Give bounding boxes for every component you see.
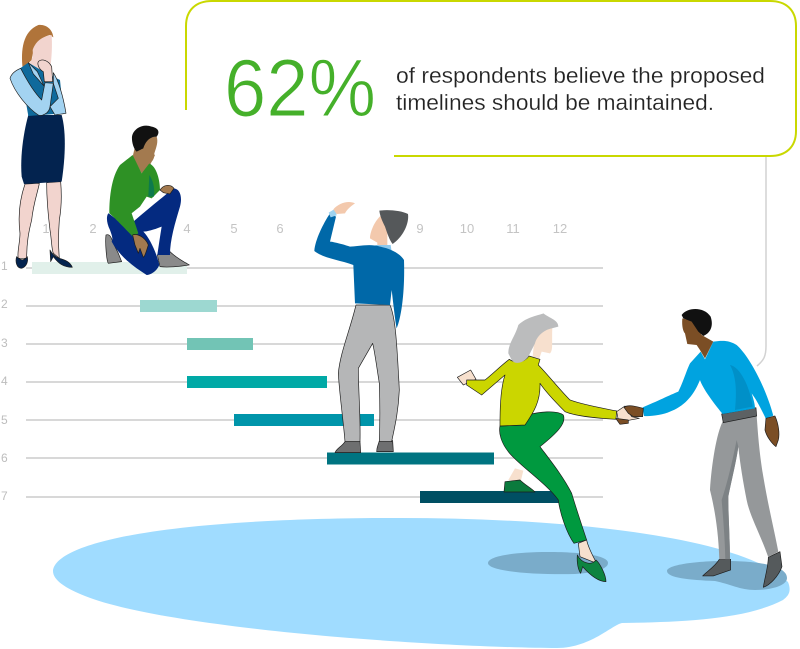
figure: kneeling man in green shirt bbox=[106, 126, 189, 275]
grey connector line bbox=[757, 157, 766, 366]
callout text: of respondents believe the proposed bbox=[396, 63, 765, 88]
column numbers: 5 bbox=[230, 221, 238, 236]
figure: man in blue sweater shading his eyes bbox=[314, 202, 408, 453]
row numbers: 4 bbox=[1, 374, 8, 388]
column numbers: 12 bbox=[553, 221, 567, 236]
callout text bbox=[396, 63, 765, 115]
gantt chart bbox=[1, 221, 603, 503]
column numbers bbox=[42, 221, 567, 236]
row grid lines bbox=[26, 268, 603, 497]
callout text: timelines should be maintained. bbox=[396, 90, 714, 115]
row numbers: 5 bbox=[1, 413, 8, 427]
gantt bars bbox=[32, 262, 560, 503]
row numbers: 2 bbox=[1, 297, 8, 311]
figure: grey-haired woman in yellow sweater stepping up bbox=[457, 313, 639, 582]
callout bubble outline bbox=[186, 1, 796, 156]
column numbers: 4 bbox=[183, 221, 191, 236]
column numbers: 9 bbox=[416, 221, 424, 236]
row numbers: 3 bbox=[1, 336, 8, 350]
column numbers: 10 bbox=[460, 221, 474, 236]
row numbers: 1 bbox=[1, 259, 8, 273]
floor: light blue blob bbox=[53, 518, 790, 648]
row numbers: 6 bbox=[1, 451, 8, 465]
column numbers: 11 bbox=[506, 221, 520, 236]
figure: man in bright blue sweater shaking hands bbox=[616, 309, 782, 587]
floor shadows bbox=[488, 552, 787, 590]
column numbers: 2 bbox=[89, 221, 97, 236]
column numbers: 1 bbox=[42, 221, 50, 236]
row numbers: 7 bbox=[1, 489, 8, 503]
row numbers bbox=[1, 259, 8, 503]
callout statistic: 62%: 62% bbox=[224, 43, 376, 134]
column numbers: 6 bbox=[276, 221, 284, 236]
figure: standing woman in blue vest bbox=[10, 25, 72, 268]
